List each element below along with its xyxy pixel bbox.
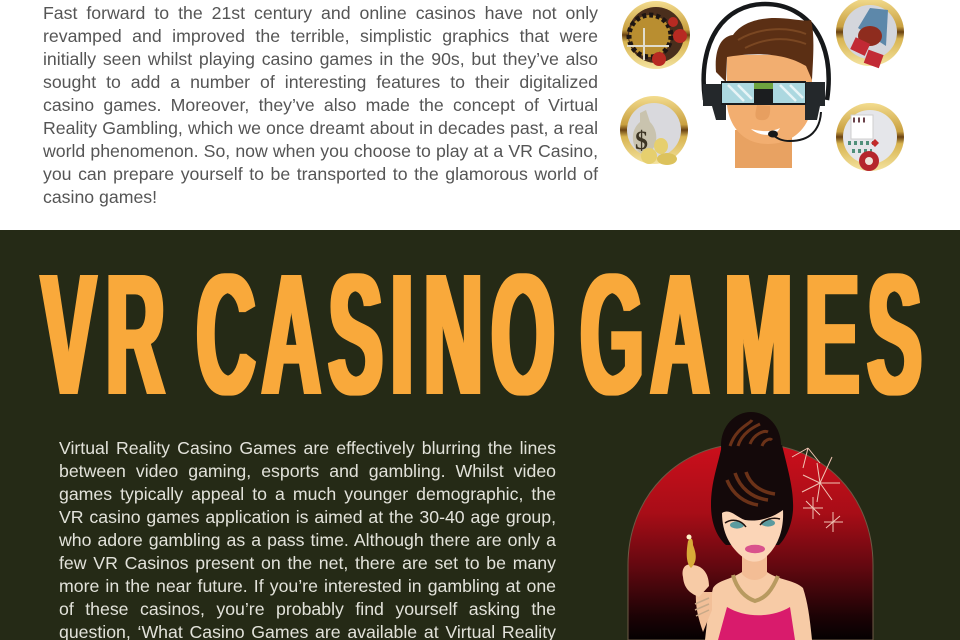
intro text block: world phenomenon. So, now when you choose to play at a VR Casino, (43, 141, 598, 161)
illustration: man in VR headset with casino medallions (620, 0, 904, 171)
mouth (751, 128, 780, 135)
earpieces (703, 84, 726, 120)
intro text block: initially seen whilst playing casino games in the 90s, but they’ve also (43, 49, 598, 69)
bracelet (695, 598, 709, 616)
medallion: money bag (620, 96, 688, 165)
body text block: who adore gambling as a pass time. Although there are only a (59, 530, 556, 550)
body text block: Virtual Reality Casino Games are effectively blurring the lines (59, 438, 556, 458)
medallion: cards and chips (836, 103, 904, 171)
sparkles (792, 448, 843, 532)
intro text block: revamped and improved the terrible, simplistic graphics that were (43, 26, 598, 46)
nose shadow (755, 105, 770, 120)
intro text block: Reality Gambling, which we once dreamt about in decades past, a real (43, 118, 598, 138)
face (722, 510, 783, 562)
headband (704, 4, 829, 100)
intro text block: casino games. Moreover, they’ve also made the concept of Virtual (43, 95, 598, 115)
neck (742, 556, 767, 580)
body text block: between video gaming, esports and gambling. Whilst video (59, 461, 556, 481)
face (727, 55, 812, 144)
forearm (696, 592, 712, 632)
intro text block: sought to add a number of interesting features to their digitalized (43, 72, 598, 92)
body text block: more in the near future. If you’re interested in gambling at one (59, 576, 556, 596)
lips (745, 545, 765, 553)
hair beehive (721, 412, 781, 478)
dress (718, 607, 795, 640)
man figure (703, 4, 829, 168)
body text block (59, 438, 556, 640)
microphone (773, 112, 821, 141)
visor (721, 81, 806, 105)
woman figure (683, 412, 812, 640)
medallion: money bag: $ (635, 126, 648, 155)
medallion: roulette (622, 1, 690, 69)
necklace (733, 575, 778, 601)
body text block: few VR Casinos present on the net, there are set to be many (59, 553, 556, 573)
dark section background (0, 230, 960, 640)
intro text block: Fast forward to the 21st century and online casinos have not only (43, 3, 598, 23)
hair (716, 18, 813, 82)
red arch (628, 444, 873, 640)
intro text block (43, 3, 598, 207)
hair highlights (730, 420, 772, 446)
eyes (730, 521, 744, 529)
torso (705, 572, 812, 640)
hand (683, 565, 709, 597)
title: VR CASINO GAMES (42, 238, 922, 431)
body text block: VR casino games application is aimed at the 30-40 age group, (59, 507, 556, 527)
neck (735, 130, 792, 168)
body text block: games typically appeal to a much younger demographic, the (59, 484, 556, 504)
intro text block: you can prepare yourself to be transported to the glamorous world of (43, 164, 598, 184)
medallion: dice cup (836, 0, 904, 68)
champagne glass (687, 539, 696, 568)
body text block: of these casinos, you’re probably find yourself asking the (59, 599, 556, 619)
intro text block: casino games! (43, 187, 157, 207)
